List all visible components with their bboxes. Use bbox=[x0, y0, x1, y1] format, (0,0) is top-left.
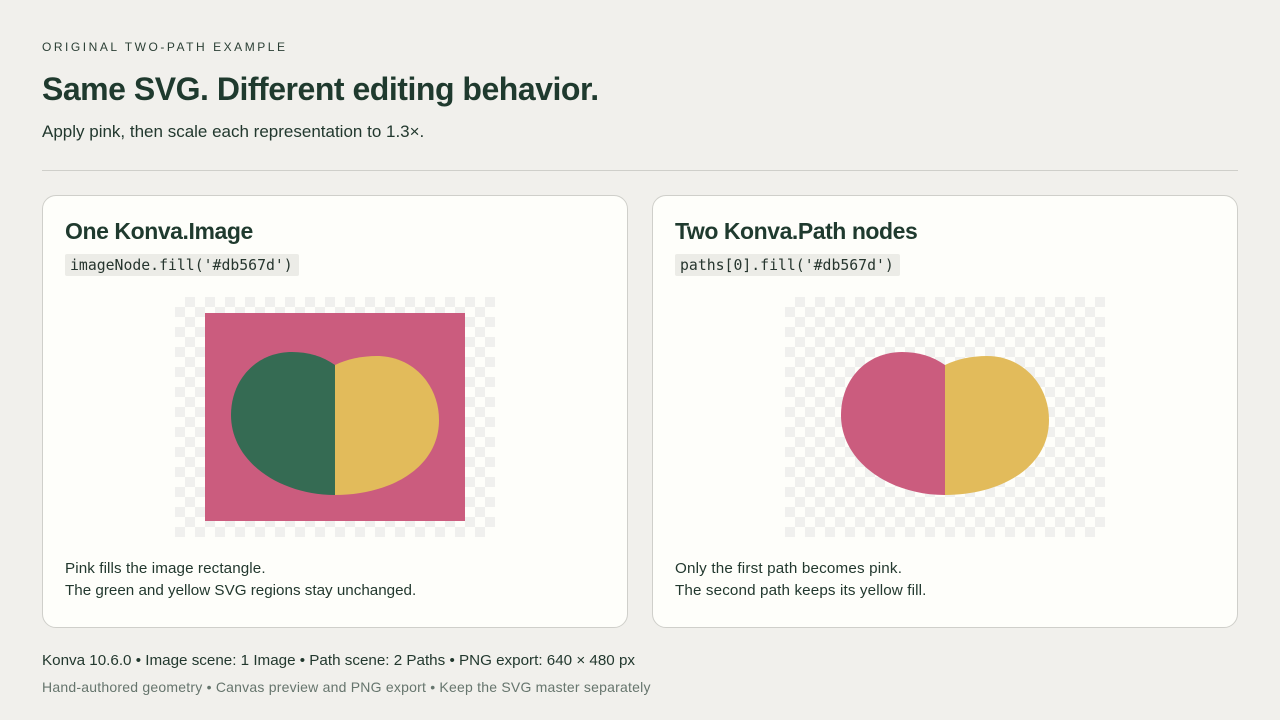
code: paths fill: paths[0].fill('#db567d') bbox=[680, 257, 894, 274]
caption: The second path keeps its yellow fill. bbox=[675, 582, 926, 599]
preview: two separate paths bbox=[785, 297, 1105, 537]
panel: one Konva.Image bbox=[42, 195, 628, 628]
caption bbox=[65, 560, 416, 599]
footer stats: Konva 10.6.0 • Image scene: 1 Image • Path scene: 2 Paths • PNG export: 640 × 480 px bbox=[42, 652, 635, 669]
caption bbox=[675, 560, 926, 599]
panel: two Konva.Path nodes bbox=[652, 195, 1238, 628]
heading: One Konva.Image: One Konva.Image bbox=[65, 218, 253, 244]
caption: Only the first path becomes pink. bbox=[675, 560, 902, 577]
title: Same SVG. Different editing behavior. bbox=[42, 71, 599, 107]
footer note: Hand-authored geometry • Canvas preview and PNG export • Keep the SVG master separately bbox=[42, 679, 651, 695]
preview: pink image rectangle with two regions bbox=[175, 297, 495, 537]
eyebrow label: ORIGINAL TWO-PATH EXAMPLE bbox=[42, 40, 288, 54]
caption: Pink fills the image rectangle. bbox=[65, 560, 266, 577]
code: imageNode fill: imageNode.fill('#db567d') bbox=[70, 257, 293, 274]
subtitle: Apply pink, then scale each representation to 1.3×. bbox=[42, 122, 424, 141]
heading: Two Konva.Path nodes: Two Konva.Path nodes bbox=[675, 218, 917, 244]
caption: The green and yellow SVG regions stay unchanged. bbox=[65, 582, 416, 599]
